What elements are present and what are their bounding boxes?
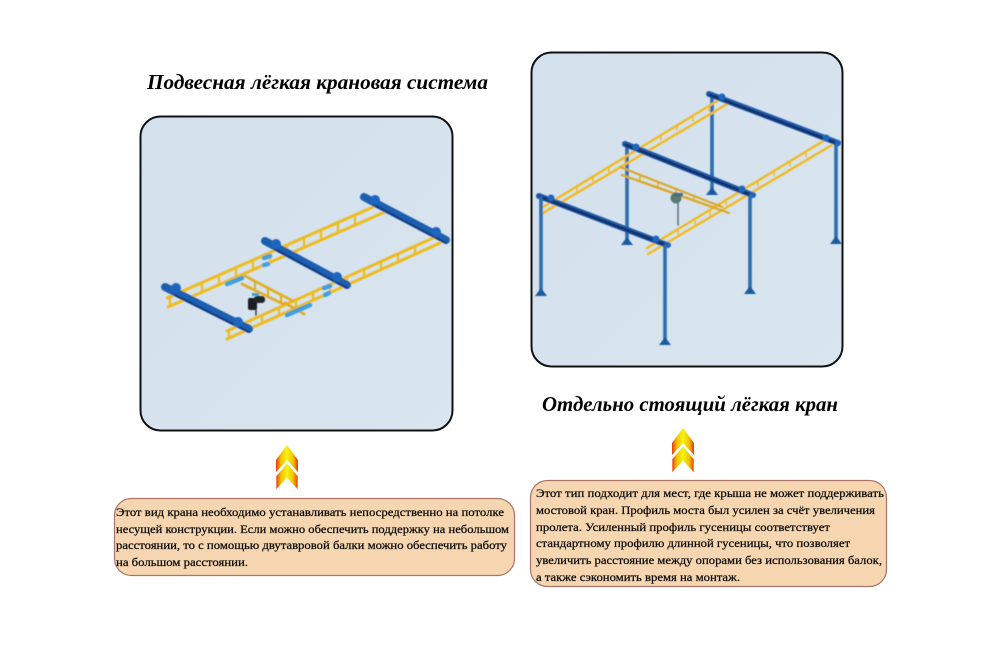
title: suspended crane: Подвесная лёгкая крановая система — [146, 70, 488, 94]
bridge: yellow cross girder — [242, 276, 304, 314]
track: upper yellow ladder — [167, 207, 385, 307]
front posts — [541, 196, 750, 340]
beams: blue runways — [539, 94, 838, 245]
track: lower yellow ladder — [227, 238, 440, 339]
light blue trolleys — [227, 256, 330, 315]
illustration: suspended crane — [165, 195, 446, 339]
text box: freestanding crane description: увеличить расстояние между опорами без использования балок, — [536, 553, 882, 567]
text box: suspended crane description: несущей конструкции. Если можно обеспечить поддержку на небольшом — [116, 522, 509, 536]
title: freestanding crane: Отдельно стоящий лёгкая кран — [542, 392, 838, 416]
beam clamps — [171, 195, 441, 327]
rear posts — [627, 97, 836, 240]
text box: freestanding crane description: стандартному профилю длинной гусеницы, что позволяет — [536, 536, 851, 550]
icon: hoist — [248, 293, 265, 315]
text box: freestanding crane description: пролета. Усиленный профиль гусеницы соответствует — [536, 520, 831, 534]
icon: hoist — [670, 192, 683, 225]
front post bases — [535, 286, 756, 345]
beams: blue runways — [165, 197, 446, 332]
track: lower yellow ladder — [647, 140, 832, 254]
text box: suspended crane description — [114, 498, 514, 576]
text box: suspended crane description: расстоянии, то с помощью двутавровой балки можно обеспечить работу — [116, 538, 507, 552]
beam clamps — [548, 94, 841, 248]
track: upper yellow ladder — [543, 98, 729, 213]
illustration: freestanding crane — [535, 94, 842, 345]
text box: freestanding crane description — [530, 480, 886, 586]
panel: freestanding crane image — [532, 52, 842, 366]
text box: freestanding crane description: мостовой кран. Профиль моста был усилен за счёт увеличения — [536, 503, 876, 517]
text box: freestanding crane description: Этот тип подходит для мест, где крыша не может поддерживать — [536, 486, 885, 500]
text box: suspended crane description: на большом расстоянии. — [116, 555, 248, 569]
arrow: right double chevron — [672, 428, 694, 473]
text box: suspended crane description: Этот вид крана необходимо устанавливать непосредственно на потолке — [116, 505, 504, 519]
rear post bases — [621, 187, 842, 245]
panel: suspended crane image — [140, 116, 452, 430]
arrow: left double chevron — [276, 445, 298, 490]
text box: freestanding crane description: а также сэкономить время на монтаж. — [536, 570, 740, 584]
bridge: yellow cross girder — [620, 167, 729, 213]
